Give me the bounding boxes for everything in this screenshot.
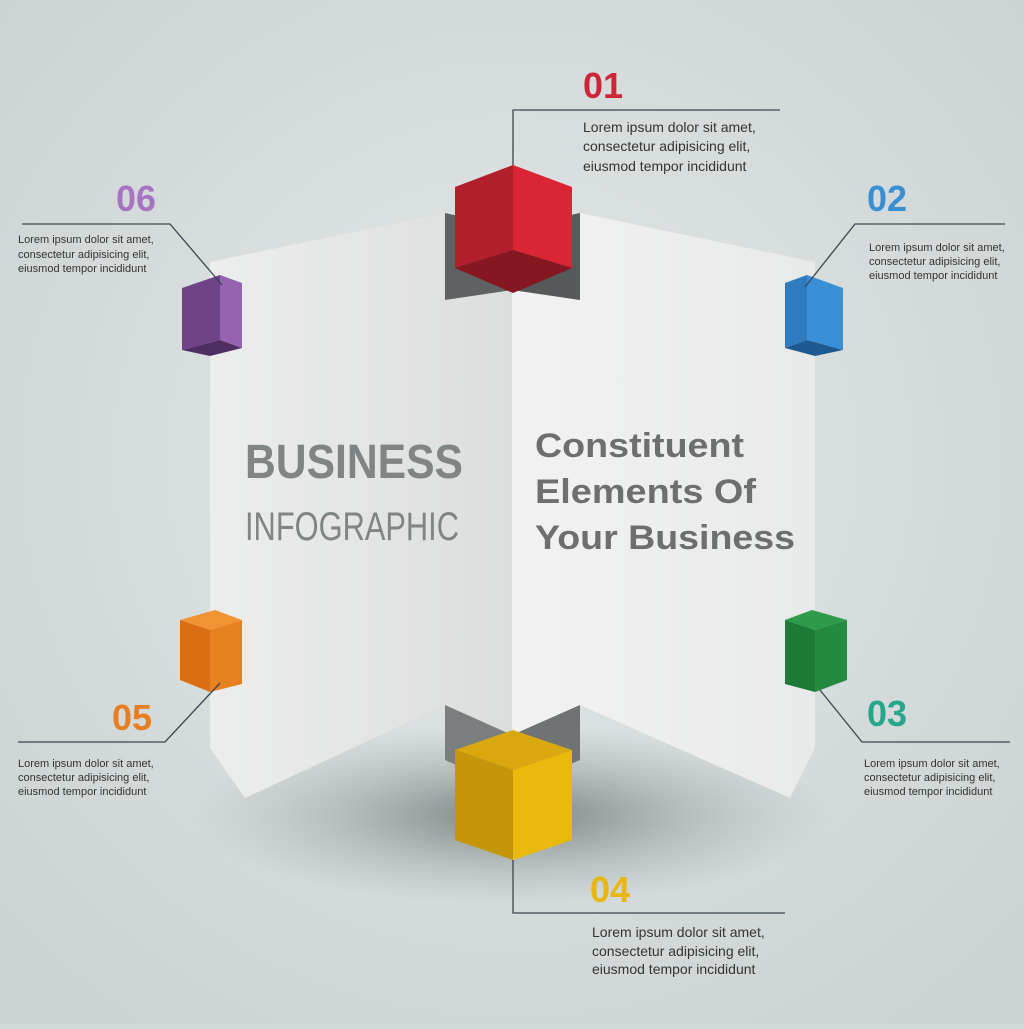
heading: constituent elements: Elements Of [535,473,757,511]
label 02: Lorem ipsum dolor sit amet, [869,242,1005,254]
label 05: consectetur adipisicing elit, [18,772,149,784]
label 01 [583,65,756,174]
connector lines [18,110,1010,913]
shadow [192,725,832,905]
label 04: 04 [590,869,630,910]
title: business infographic: BUSINESS [245,436,463,489]
label 04: consectetur adipisicing elit, [592,943,759,959]
label 01: eiusmod tempor incididunt [583,158,747,174]
label 05: eiusmod tempor incididunt [18,786,146,798]
label 06: Lorem ipsum dolor sit amet, [18,234,154,246]
label 02: 02 [867,178,907,219]
cube 04 yellow [455,730,572,860]
cube 05 orange [180,610,242,692]
cube 02 blue [785,275,843,356]
heading: constituent elements: Constituent [535,427,744,465]
label 06 [18,178,156,275]
big cube [210,213,815,798]
title: business infographic: INFOGRAPHIC [245,505,459,549]
label 01: Lorem ipsum dolor sit amet, [583,119,756,135]
label 03: 03 [867,693,907,734]
label 04 [590,869,765,977]
cube 06 purple [182,275,242,356]
label 04: Lorem ipsum dolor sit amet, [592,924,765,940]
label 04: eiusmod tempor incididunt [592,961,756,977]
label 01: 01 [583,65,623,106]
label 05 [18,697,154,798]
title: business infographic [245,436,463,549]
heading: constituent elements: Your Business [535,519,795,557]
label 02 [867,178,1005,282]
label 03: Lorem ipsum dolor sit amet, [864,758,1000,770]
label 03 [864,693,1000,798]
cube 03 green [785,610,847,692]
label 05: 05 [112,697,152,738]
label 02: eiusmod tempor incididunt [869,270,997,282]
label 06: consectetur adipisicing elit, [18,249,149,261]
label 06: eiusmod tempor incididunt [18,263,146,275]
heading: constituent elements [535,427,795,557]
cube 01 red [455,165,572,293]
label 02: consectetur adipisicing elit, [869,256,1000,268]
label 03: consectetur adipisicing elit, [864,772,995,784]
label 03: eiusmod tempor incididunt [864,786,992,798]
label 06: 06 [116,178,156,219]
label 05: Lorem ipsum dolor sit amet, [18,758,154,770]
label 01: consectetur adipisicing elit, [583,138,750,154]
